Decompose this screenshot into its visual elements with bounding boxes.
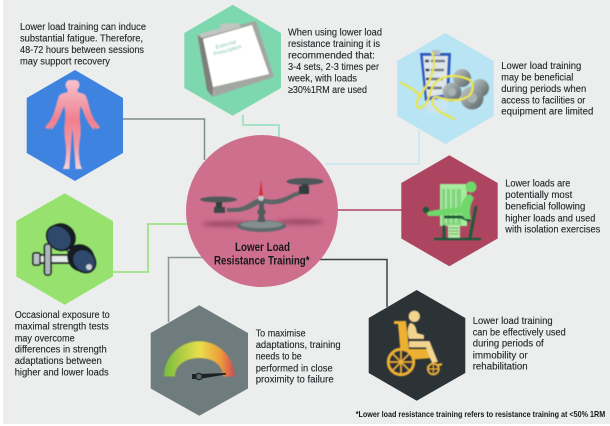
text: limited access: during periods when [501, 84, 586, 95]
text: strength tests: maximal strength tests [15, 322, 109, 333]
icon: leg extension machine [423, 182, 481, 239]
pink circle [186, 135, 338, 287]
central circle: lower load resistance training [186, 135, 338, 287]
text: immobility: immobility or [473, 350, 528, 361]
text: limited access: Lower load training [501, 61, 581, 72]
title: Lower Load [235, 242, 290, 254]
green hexagon [16, 193, 113, 305]
text: prescription: recommended that: [288, 51, 375, 62]
text: fatigue: 48-72 hours between sessions [20, 45, 144, 56]
label: exercise prescription: Prescription [213, 44, 243, 58]
text: proximity: To maximise [256, 328, 306, 339]
text: immobility: can be effectively used [473, 327, 566, 338]
connector: equipment to centre [325, 130, 419, 164]
dark hexagon [369, 290, 465, 401]
connector: body to centre [123, 119, 204, 160]
title [214, 242, 310, 267]
text: fatigue: substantial fatigue. Therefore, [20, 34, 143, 44]
text: immobility [473, 316, 566, 373]
connector: gauge to centre [168, 258, 206, 322]
text: proximity: needs to be [256, 351, 302, 362]
text: fatigue: Lower load training can induce [20, 22, 146, 33]
text: strength tests: Occasional exposure to [15, 310, 110, 321]
panel: limited access to equipment [397, 33, 593, 144]
text: prescription: resistance training it is [288, 39, 380, 50]
label: exercise prescription [211, 38, 243, 58]
text: strength tests [15, 310, 110, 379]
text: prescription: ≥30%1RM are used [288, 85, 367, 96]
text: isolation: beneficial following [505, 201, 585, 212]
panel: proximity to failure [151, 305, 341, 416]
icon: wheelchair [388, 311, 442, 375]
crimson hexagon [401, 155, 498, 266]
text: proximity: proximity to failure [256, 375, 334, 386]
icon: dumbbells [33, 218, 100, 277]
text: prescription: When using lower load [288, 28, 382, 39]
panel: maximal strength tests [15, 193, 113, 379]
icon: checklist, dumbbells and band [401, 50, 489, 119]
text: isolation: Lower loads are [505, 179, 571, 190]
connector: machine to centre [337, 209, 402, 211]
blue hexagon [27, 70, 123, 181]
text: limited access [501, 61, 593, 118]
panel: fatigue and recovery [20, 22, 146, 181]
text: isolation: with isolation exercises [504, 225, 600, 236]
text: immobility: rehabilitation [473, 362, 528, 373]
text: immobility: Lower load training [473, 316, 553, 327]
grey hexagon [151, 305, 248, 416]
text: isolation [504, 179, 600, 236]
text: proximity: performed in close [256, 363, 333, 374]
text: prescription: 3-4 sets, 2-3 times per [288, 62, 380, 73]
text: fatigue [20, 22, 146, 68]
text: isolation: higher loads and used [505, 213, 595, 224]
text: immobility: during periods of [473, 339, 544, 350]
text: proximity [256, 328, 341, 386]
panel: immobility and rehabilitation [369, 290, 566, 401]
text: prescription [287, 28, 382, 96]
text: strength tests: may overcome [15, 333, 75, 344]
connector: prescription to centre [243, 115, 279, 138]
text: strength tests: differences in strength [15, 345, 107, 356]
title: Resistance Training* [214, 255, 310, 267]
text: limited access: access to facilities or [501, 95, 586, 106]
icon: human body [45, 80, 100, 169]
text: isolation: potentially most [505, 190, 573, 201]
text: limited access: may be beneficial [501, 72, 573, 83]
panel: isolation exercises [401, 155, 600, 266]
text: strength tests: higher and lower loads [15, 368, 109, 379]
text: fatigue: may support recovery [20, 56, 110, 68]
label: exercise prescription: Exercise [215, 39, 237, 51]
icon: effort gauge [164, 341, 234, 380]
connector: wheelchair to centre [320, 260, 387, 307]
text: prescription: week, with loads [287, 74, 357, 85]
connector: dumbbells to centre [113, 224, 187, 272]
icon: clipboard [197, 21, 274, 97]
text: proximity: adaptations, training [256, 340, 341, 351]
light blue hexagon [397, 33, 494, 144]
panel: exercise prescription [184, 5, 382, 116]
text: limited access: equipment are limited [501, 107, 593, 118]
teal hexagon [184, 5, 281, 116]
text: strength tests: adaptations between [15, 356, 102, 367]
icon: balance scale [200, 178, 324, 232]
